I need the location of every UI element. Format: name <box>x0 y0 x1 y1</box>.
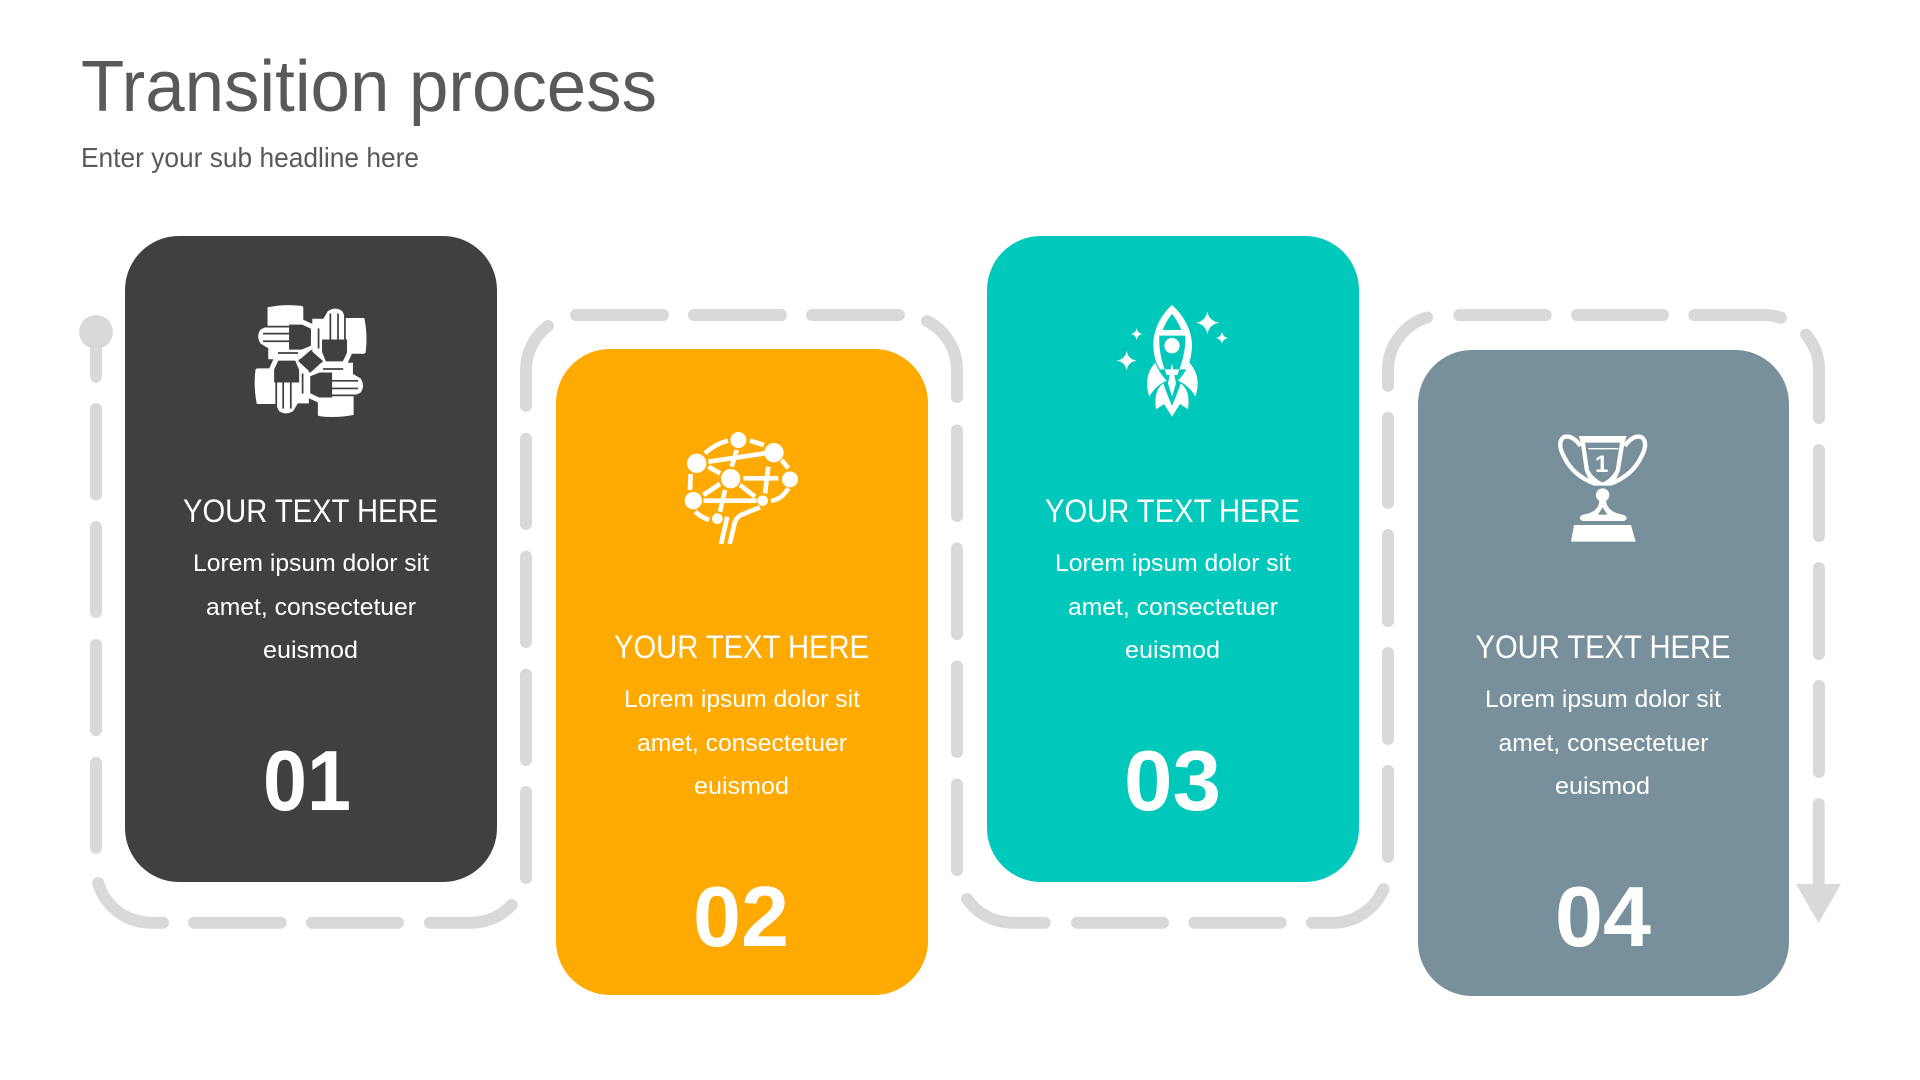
icon: rocket with stars <box>1117 305 1228 417</box>
icon: four joined hands <box>255 305 367 417</box>
panel: step 03 <box>987 236 1359 882</box>
icon: brain network <box>685 432 798 544</box>
heading: YOUR TEXT HERE <box>1476 629 1730 665</box>
body text <box>624 686 860 800</box>
trophy number: 1 <box>1595 451 1608 478</box>
number: 04 <box>1555 870 1651 965</box>
body text: Lorem ipsum dolor sit <box>193 550 429 577</box>
panel: step 01 <box>125 236 497 882</box>
heading: YOUR TEXT HERE <box>614 629 869 665</box>
body text <box>1055 550 1291 664</box>
body text: Lorem ipsum dolor sit <box>1055 550 1291 577</box>
body text: euismod <box>694 773 789 800</box>
path start dot <box>79 315 113 349</box>
panel: step 02 <box>556 349 928 995</box>
icon: trophy <box>1560 436 1645 542</box>
heading: YOUR TEXT HERE <box>183 493 438 529</box>
number: 01 <box>263 734 351 829</box>
body text: amet, consectetuer <box>1068 594 1278 621</box>
body text: amet, consectetuer <box>637 730 847 757</box>
title: Transition process <box>81 47 657 127</box>
number: 03 <box>1124 734 1221 829</box>
body text: euismod <box>1125 637 1220 664</box>
number: 02 <box>693 870 789 965</box>
panel: step 04 <box>1418 350 1789 996</box>
subtitle: Enter your sub headline here <box>81 142 419 173</box>
body text: euismod <box>1555 773 1650 800</box>
body text: amet, consectetuer <box>206 594 416 621</box>
body text <box>1485 686 1721 800</box>
heading: YOUR TEXT HERE <box>1045 493 1300 529</box>
body text: amet, consectetuer <box>1498 730 1709 757</box>
body text <box>193 550 429 664</box>
body text: Lorem ipsum dolor sit <box>1485 686 1721 713</box>
body text: euismod <box>263 637 358 664</box>
arrow: path end <box>1796 804 1841 923</box>
body text: Lorem ipsum dolor sit <box>624 686 860 713</box>
dashed process path <box>96 315 1819 923</box>
